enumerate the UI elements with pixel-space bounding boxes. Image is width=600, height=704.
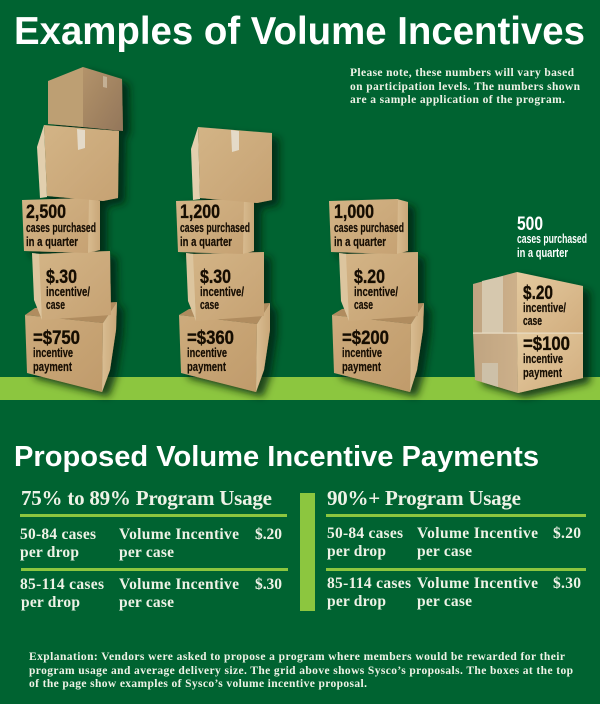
box: $.20 incentive per case: incentive/ <box>523 301 566 315</box>
box: 1,200 cases purchased: 1,200 <box>180 202 220 223</box>
row: 85-114 cases: per case <box>119 594 174 611</box>
label: 500 cases purchased <box>517 214 587 260</box>
explanation text: program usage and average delivery size. The grid above shows Sysco’s proposals. The boxes at the top <box>29 665 573 677</box>
box: 1,000 cases purchased: 1,000 <box>334 202 374 223</box>
box: $.20 incentive per case: incentive/ <box>354 285 398 299</box>
row: 85-114 cases: $.30 <box>255 576 282 593</box>
row: 50-84 cases <box>20 526 282 561</box>
box: =$360 incentive payment <box>179 303 270 392</box>
box: =$750 incentive payment: incentive <box>33 346 73 360</box>
stack: 500 cases <box>473 272 583 393</box>
box: =$100 incentive payment: =$100 <box>523 334 570 355</box>
row: 50-84 cases: per case <box>119 544 174 561</box>
box: =$360 incentive payment: =$360 <box>187 328 234 349</box>
explanation text: of the page show examples of Sysco’s volume incentive proposal. <box>29 678 367 690</box>
box: 2,500 cases purchased: cases purchased <box>26 221 96 235</box>
box: $.20 incentive per case: case <box>354 298 373 312</box>
box: 1,200 cases purchased <box>176 199 254 254</box>
box: 1,000 cases purchased <box>329 199 408 254</box>
icon: top cardboard box <box>191 127 272 203</box>
row: 85-114 cases: per drop <box>327 593 386 610</box>
row: 50-84 cases: 50-84 cases <box>327 525 403 542</box>
box: 1,000 cases purchased: cases purchased <box>334 221 404 235</box>
row: 85-114 cases: 85-114 cases <box>327 575 411 592</box>
box: =$750 incentive payment: payment <box>33 360 73 374</box>
box: $.30 incentive per case: incentive/ <box>46 285 90 299</box>
box: 2,500 cases purchased: in a quarter <box>26 235 78 249</box>
box: =$200 incentive payment <box>332 303 424 392</box>
box: =$360 incentive payment: payment <box>187 360 227 374</box>
box: 1,000 cases purchased: in a quarter <box>334 235 386 249</box>
box: =$100 incentive payment: payment <box>523 366 563 380</box>
panel: 75% to 89% program usage <box>20 486 288 611</box>
stack: 1,000 cases <box>329 199 424 392</box>
row: 50-84 cases <box>327 525 581 560</box>
row: 85-114 cases: $.30 <box>553 575 581 592</box>
icon: second cardboard box <box>37 125 119 201</box>
panel heading: 75% to 89% Program Usage <box>21 486 272 510</box>
box: $.30 incentive per case <box>186 252 264 321</box>
green floor strip <box>0 377 600 400</box>
box: $.20 incentive per case <box>339 252 418 321</box>
box: $.30 incentive per case: incentive/ <box>200 285 244 299</box>
box: $.30 incentive per case: case <box>46 298 65 312</box>
box: =$200 incentive payment: incentive <box>342 346 382 360</box>
row: 50-84 cases: per drop <box>20 544 79 561</box>
box: 1,200 cases purchased: cases purchased <box>180 221 250 235</box>
panel heading: 90%+ Program Usage <box>327 486 521 510</box>
row: 50-84 cases: per case <box>417 543 472 560</box>
explanation text: Explanation: Vendors were asked to propose a program where members would be rewarded for their <box>29 651 565 663</box>
box: 2,500 cases purchased <box>22 198 100 253</box>
box: =$200 incentive payment: =$200 <box>342 328 389 349</box>
explanation text <box>29 651 573 690</box>
row: 50-84 cases: Volume Incentive <box>119 526 239 543</box>
row: 85-114 cases <box>327 575 581 610</box>
stack: 1,200 cases <box>176 127 272 392</box>
box: $.20 incentive per case <box>473 272 583 333</box>
row: 85-114 cases <box>20 576 282 611</box>
label: 500 cases purchased: in a quarter <box>517 246 568 260</box>
box: $.20 incentive per case: $.20 <box>354 267 385 288</box>
box: =$100 incentive payment <box>473 332 583 393</box>
box: $.20 incentive per case: $.20 <box>523 283 553 304</box>
row: 85-114 cases: Volume Incentive <box>417 575 538 592</box>
row: 50-84 cases: $.20 <box>255 526 282 543</box>
icon: top cardboard box <box>48 67 123 131</box>
row: 50-84 cases: per drop <box>327 543 386 560</box>
box: $.30 incentive per case: $.30 <box>46 267 77 288</box>
stack: 2,500 cases <box>22 67 123 392</box>
box: =$750 incentive payment: =$750 <box>33 328 80 349</box>
box: $.30 incentive per case <box>32 251 111 320</box>
box: $.30 incentive per case: case <box>200 298 219 312</box>
note about sample numbers: Please note, these numbers will vary based <box>350 67 575 79</box>
title: Examples of Volume Incentives <box>14 10 585 53</box>
row: 85-114 cases: 85-114 cases <box>20 576 104 593</box>
box: $.30 incentive per case: $.30 <box>200 267 231 288</box>
note about sample numbers: are a sample application of the program. <box>350 94 565 106</box>
row: 85-114 cases: Volume Incentive <box>119 576 239 593</box>
heading: proposed payments: Proposed Volume Incentive Payments <box>14 441 539 473</box>
box: 1,200 cases purchased: in a quarter <box>180 235 232 249</box>
row: 50-84 cases: Volume Incentive <box>417 525 538 542</box>
row: 85-114 cases: per drop <box>21 594 80 611</box>
panel: 90%+ program usage <box>326 486 586 610</box>
note about sample numbers: on participation levels. The numbers shown <box>350 81 581 93</box>
row: 50-84 cases: 50-84 cases <box>20 526 96 543</box>
label: 500 cases purchased: 500 <box>517 214 543 235</box>
box: $.20 incentive per case: case <box>523 314 542 328</box>
row: 50-84 cases: $.20 <box>553 525 581 542</box>
box: 2,500 cases purchased: 2,500 <box>26 202 66 223</box>
row: 85-114 cases: per case <box>417 593 472 610</box>
box: =$100 incentive payment: incentive <box>523 352 563 366</box>
box: =$750 incentive payment <box>25 302 117 392</box>
note about sample numbers <box>350 67 581 106</box>
box: =$200 incentive payment: payment <box>342 360 382 374</box>
box: =$360 incentive payment: incentive <box>187 346 227 360</box>
center divider bar <box>300 493 315 611</box>
